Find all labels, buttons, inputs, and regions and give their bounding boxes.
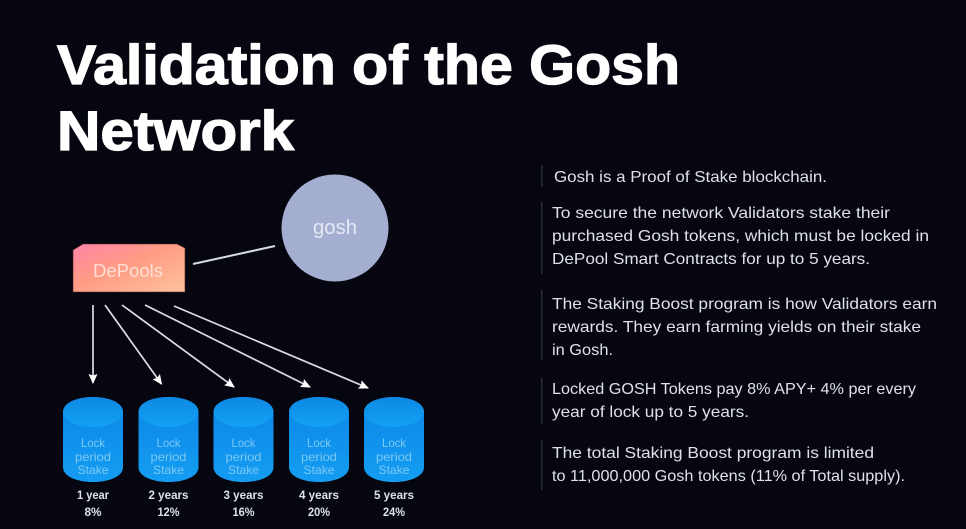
text block: staking boost program: rewards. They earn farming yields on their stake [552,319,921,336]
cylinder: 3 years: Stake [228,463,259,477]
cylinder: 3 years: Lock [232,436,256,450]
DePools box [73,244,185,292]
cylinder: 3 years: period [226,450,262,464]
connector: DePools to gosh [193,246,275,264]
text block: proof of stake: Gosh is a Proof of Stake blockchain. [554,169,827,186]
cylinder: 3 years: 16% [232,507,254,519]
text block: securing the network [541,202,929,274]
text block: APY [541,378,916,424]
cylinder: 1 year [63,397,123,519]
cylinder: 5 years: Stake [378,463,410,477]
text block: program limit: to 11,000,000 Gosh tokens (11% of Total supply). [552,468,905,485]
cylinder: 4 years: 20% [308,507,330,519]
cylinder: 2 years: 2 years [148,490,188,502]
text block: securing the network: DePool Smart Contracts for up to 5 years. [552,251,870,268]
gosh circle node: gosh [313,217,357,239]
cylinder: 5 years: Lock [382,436,407,450]
cylinder: 4 years [289,397,349,519]
cylinder: 5 years: 5 years [374,490,414,502]
text block: APY: Locked GOSH Tokens pay 8% APY+ 4% per every [552,381,916,398]
cylinder: 2 years: period [150,450,186,464]
cylinder: 1 year: period [75,450,111,464]
cylinder: 3 years [214,397,274,519]
cylinder: 3 years: 3 years [224,490,264,502]
title [57,33,680,162]
cylinder: 2 years: Lock [156,436,181,450]
text block: program limit [541,440,905,490]
text block: staking boost program [541,290,937,360]
cylinder: 4 years: Stake [304,463,335,477]
gosh circle node [282,174,388,282]
text block: staking boost program: The Staking Boost program is how Validators earn [552,296,937,313]
cylinder: 1 year: 1 year [77,490,109,502]
text block: securing the network: purchased Gosh tokens, which must be locked in [552,228,929,245]
text block: program limit: The total Staking Boost program is limited [552,445,874,462]
cylinder: 1 year: 8% [84,507,102,519]
cylinder: 2 years [138,397,198,519]
cylinder: 4 years: 4 years [299,490,339,502]
text block: APY: year of lock up to 5 years. [552,404,749,421]
cylinder: 1 year: Stake [78,463,109,477]
text block: securing the network: To secure the network Validators stake their [552,205,891,222]
cylinder: 1 year: Lock [81,436,106,450]
DePools box: DePools [93,261,163,281]
cylinder: 2 years: 12% [158,507,180,519]
title: Validation of the Gosh [57,33,680,96]
arrows from DePools to lock period stakes [93,305,368,388]
cylinder: 5 years: 24% [383,507,405,519]
cylinder: 5 years [364,397,424,519]
title: Network [57,99,295,162]
cylinder: 4 years: Lock [307,436,332,450]
cylinder: 4 years: period [301,450,337,464]
cylinder: 2 years: Stake [153,463,184,477]
text block: staking boost program: in Gosh. [552,342,613,359]
cylinder: 5 years: period [376,450,412,464]
